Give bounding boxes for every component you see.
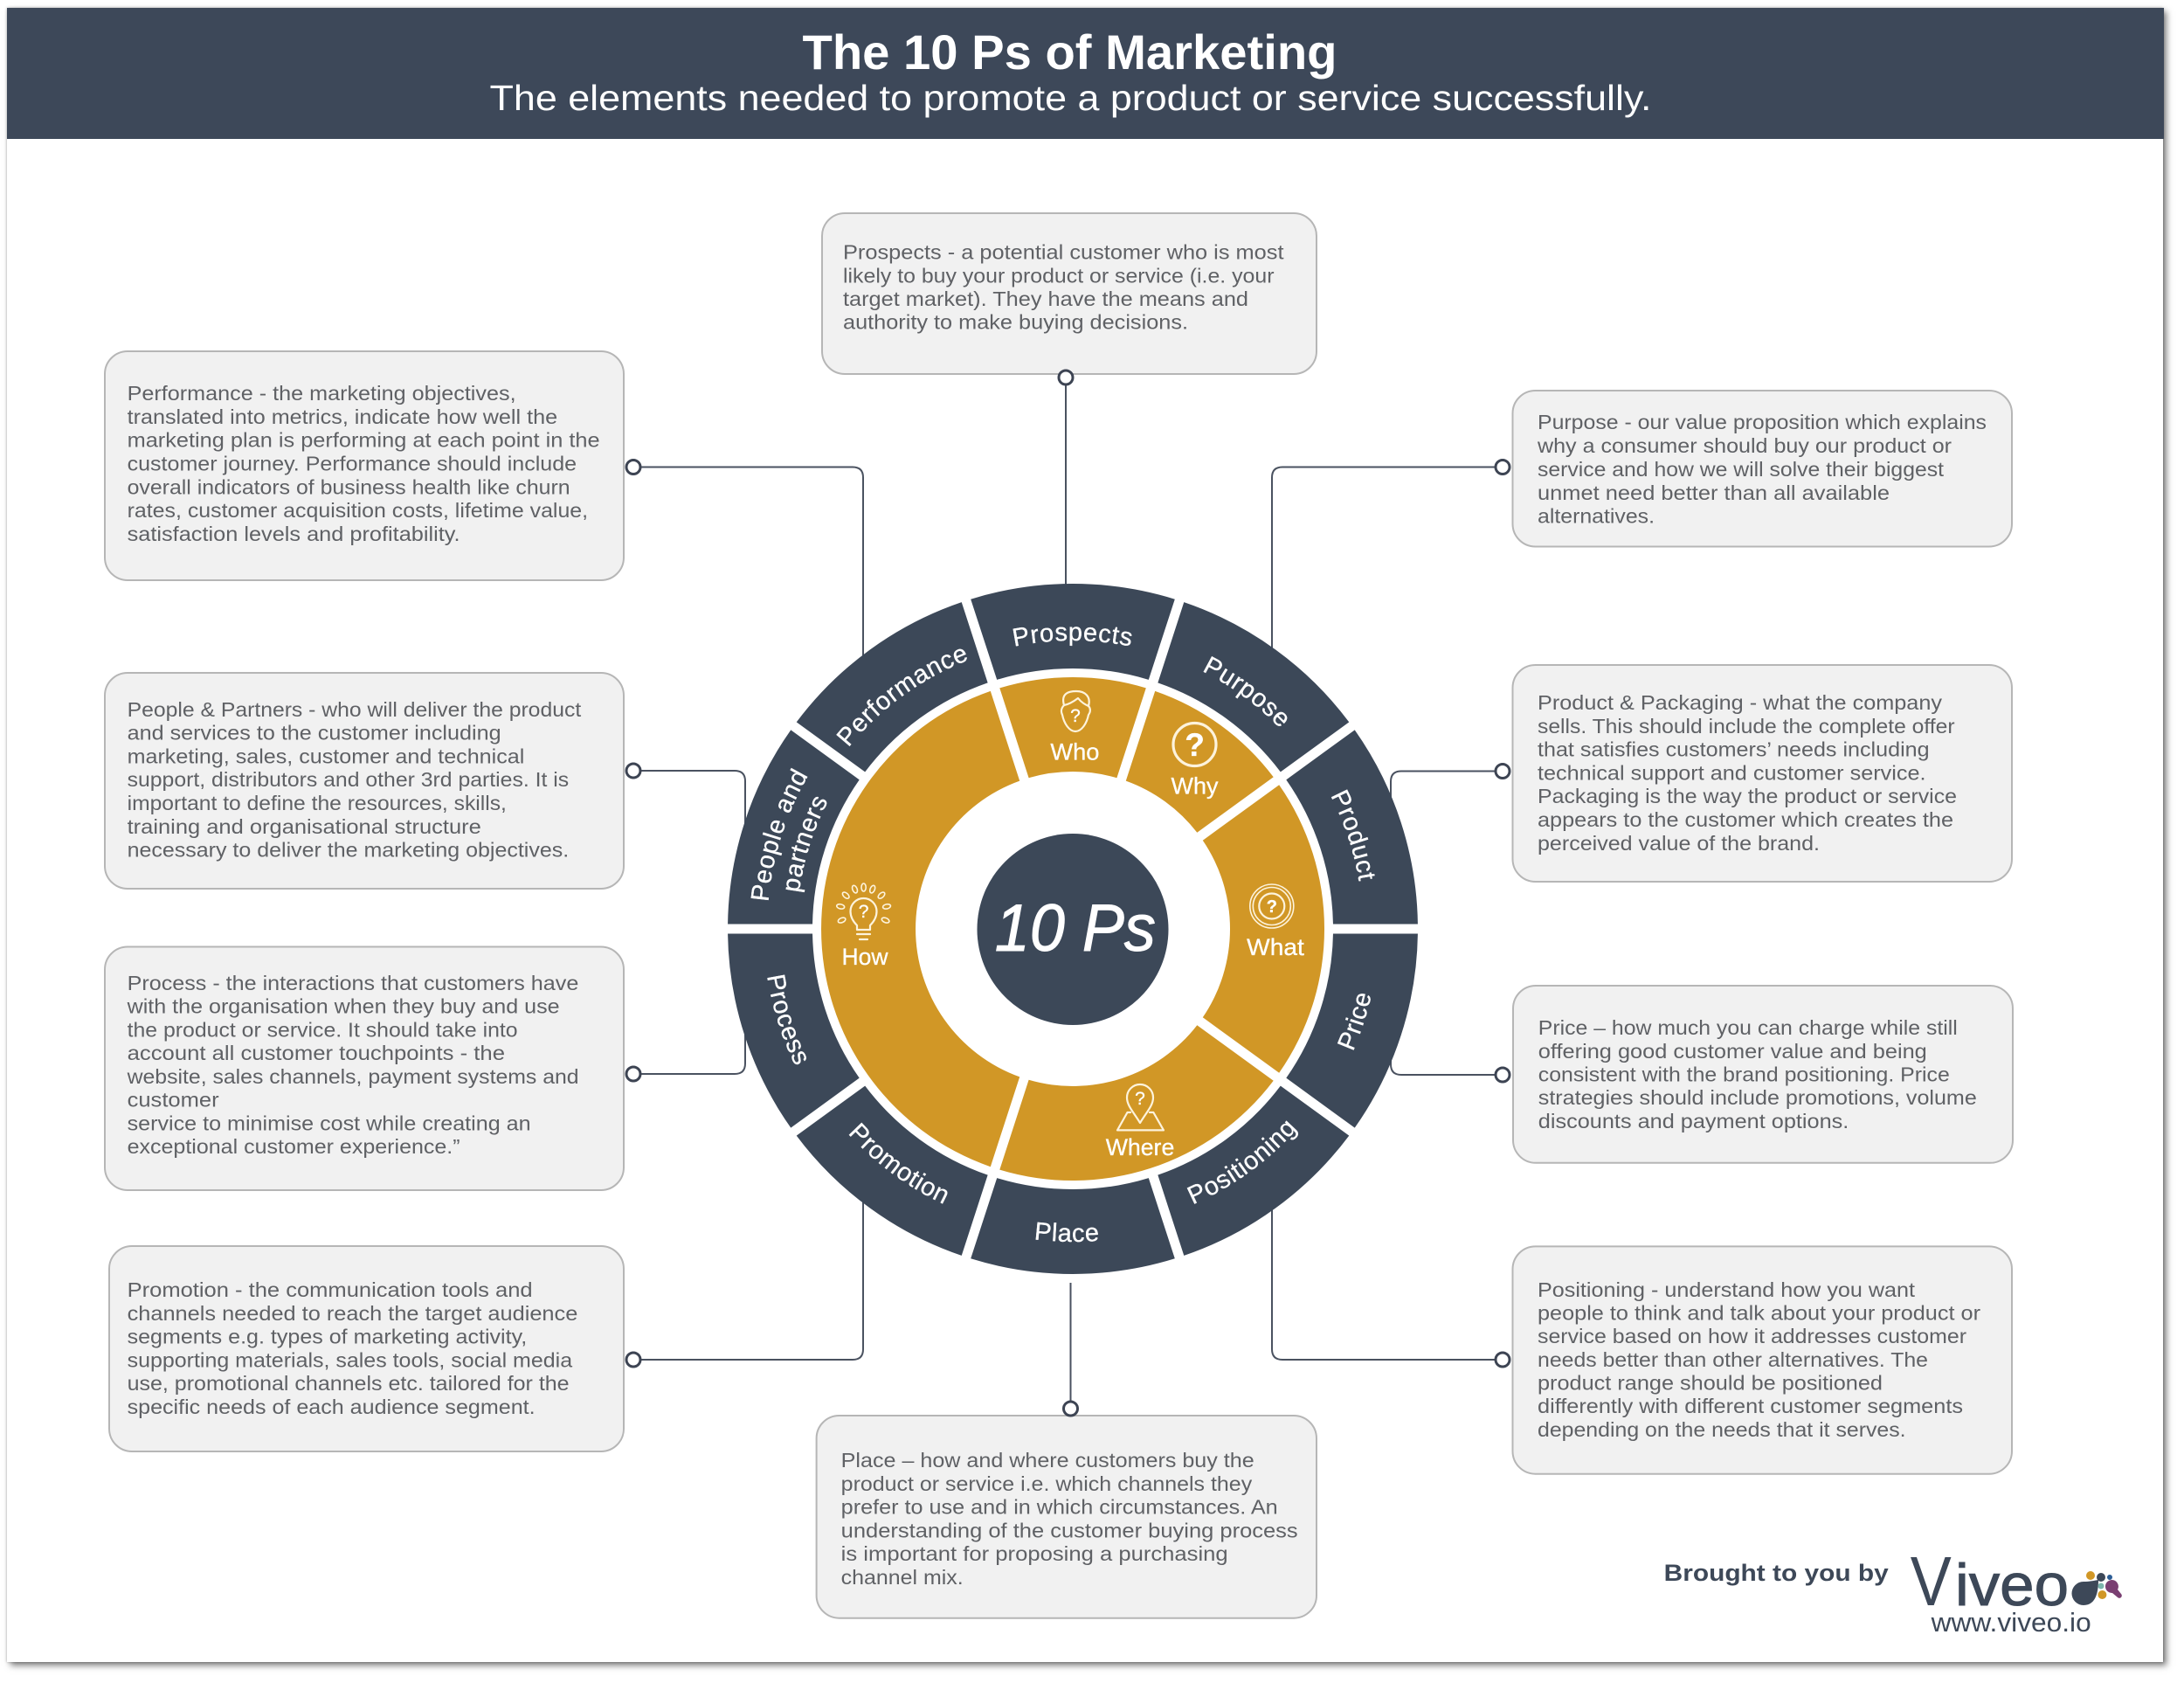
panel: People and Partners: and services to the customer including [128, 722, 501, 745]
panel: Positioning: needs better than other alternatives. The [1538, 1348, 1928, 1371]
title: The 10 Ps of Marketing [802, 24, 1337, 80]
segment: Who: Who [1050, 739, 1099, 765]
connector: Performance [626, 460, 863, 660]
logo: Viveo: V [1911, 1542, 1952, 1620]
panel: Purpose: why a consumer should buy our product or [1537, 434, 1952, 457]
segment: Who [999, 677, 1146, 778]
segment: How: How [842, 944, 888, 970]
panel: Performance [105, 351, 624, 580]
connector: Price [1391, 1059, 1510, 1082]
panel: Price [1513, 986, 2013, 1163]
panel: Price: consistent with the brand positioning. Price [1538, 1063, 1950, 1085]
segment: Performance: Performance [836, 648, 967, 746]
panel: Prospects: target market). They have the means and [843, 287, 1248, 310]
panel: Performance: customer journey. Performance should include [128, 453, 577, 475]
panel: Performance: translated into metrics, indicate how well the [128, 405, 557, 428]
panel: Positioning: people to think and talk about your product or [1538, 1302, 1980, 1325]
panel: Positioning: product range should be positioned [1538, 1372, 1883, 1395]
panel: Process: service to minimise cost while creating an [128, 1112, 531, 1134]
logo: Viveo: iveo [1955, 1552, 2069, 1618]
panel: Price: Price – how much you can charge while still [1538, 1016, 1958, 1039]
panel: People and Partners [105, 673, 624, 889]
panel: Performance: rates, customer acquisition costs, lifetime value, [128, 499, 588, 522]
panel: People and Partners: important to define the resources, skills, [128, 792, 507, 814]
panel: Product and Packaging [1513, 665, 2012, 882]
panel: Place: Place – how and where customers buy the [841, 1449, 1254, 1472]
icon: head with question mark [1061, 691, 1090, 731]
panel: People and Partners: necessary to deliver the marketing objectives. [128, 839, 569, 862]
segment: Promotion [797, 1085, 988, 1256]
icon: double ring question mark: ? [1267, 897, 1277, 917]
segment: People and partners [728, 730, 860, 925]
panel: People and Partners: training and organisational structure [128, 815, 481, 838]
wheel: inner gold ring of questions [821, 677, 1324, 1181]
panel: People and Partners: support, distributors and other 3rd parties. It is [128, 768, 569, 791]
panel: Prospects: authority to make buying decisions. [843, 311, 1188, 334]
panel: Place: product or service i.e. which channels they [841, 1472, 1252, 1495]
panel: Performance: Performance - the marketing objectives, [128, 382, 516, 405]
panel: Product and Packaging: that satisfies customers’ needs including [1538, 738, 1930, 761]
panel: Process: account all customer touchpoints - the [128, 1042, 505, 1064]
connector: Prospects [1059, 371, 1073, 587]
panel: Price: strategies should include promotions, volume [1538, 1086, 1977, 1109]
connector: Positioning [1272, 1206, 1510, 1367]
segment: Where [999, 1025, 1274, 1181]
segment: Prospects [971, 584, 1175, 680]
segment: Price: Price [1337, 994, 1371, 1050]
segment: Price [1286, 933, 1418, 1128]
segment: How [821, 691, 1019, 1167]
panel: Prospects: likely to buy your product or service (i.e. your [843, 264, 1275, 287]
panel: Product and Packaging: perceived value of the brand. [1538, 832, 1820, 855]
connector: Promotion [626, 1199, 863, 1367]
segment: Process: Process [767, 975, 806, 1064]
connector: Place [1064, 1283, 1078, 1416]
subtitle: The elements needed to promote a product or service successfully. [489, 78, 1651, 118]
panel: Price: offering good customer value and being [1538, 1040, 1927, 1063]
panel: Process: Process - the interactions that customers have [128, 972, 578, 994]
connector: Purpose [1272, 460, 1510, 652]
panel: Prospects [822, 213, 1317, 374]
panel: Promotion: segments e.g. types of marketing activity, [128, 1326, 527, 1348]
wheel: outer ring of ten Ps [728, 584, 1418, 1274]
icon: light bulb: ? [859, 902, 868, 922]
icon: light bulb [836, 883, 891, 939]
icon: circled question mark: ? [1185, 727, 1205, 763]
panel: Product and Packaging: appears to the customer which creates the [1538, 808, 1953, 831]
panel: Product and Packaging: technical support and customer service. [1538, 761, 1925, 784]
panel: Positioning: service based on how it addresses customer [1538, 1325, 1966, 1347]
icon: map pin [1117, 1084, 1164, 1130]
segment: Positioning: Positioning [1186, 1120, 1298, 1204]
panel: Product and Packaging: Packaging is the way the product or service [1538, 785, 1957, 807]
segment: Why [1126, 691, 1274, 833]
segment: What [1203, 785, 1324, 1073]
panel: Promotion: channels needed to reach the target audience [128, 1302, 577, 1325]
connector: Product [1391, 764, 1510, 800]
panel: Place: understanding of the customer buying process [841, 1519, 1298, 1541]
connector: Process [626, 1033, 745, 1081]
panel: Process [105, 947, 624, 1190]
segment: Product: Product [1331, 789, 1375, 881]
panel: Purpose: service and how we will solve their biggest [1538, 458, 1944, 481]
panel: Promotion: Promotion - the communication tools and [128, 1278, 533, 1301]
brand: website: www.viveo.io [1931, 1607, 2091, 1638]
icon: map pin: ? [1135, 1089, 1145, 1109]
icon: head with question mark: ? [1070, 706, 1081, 726]
panel: Place [817, 1416, 1317, 1618]
panel: Price: discounts and payment options. [1538, 1110, 1849, 1132]
panel: Purpose: unmet need better than all available [1538, 481, 1890, 504]
panel: Purpose [1513, 391, 2012, 547]
panel: Positioning [1513, 1246, 2012, 1474]
brand: Brought to you by: Brought to you by [1664, 1560, 1889, 1586]
panel: People and Partners: marketing, sales, customer and technical [128, 745, 524, 767]
segment: Product [1286, 730, 1418, 925]
logo: Viveo [1911, 1542, 2122, 1620]
panel: Process: exceptional customer experience.” [128, 1135, 460, 1158]
panel: Purpose: Purpose - our value proposition which explains [1538, 411, 1987, 433]
panel: Promotion: specific needs of each audience segment. [128, 1396, 536, 1418]
segment: Prospects: Prospects [1013, 627, 1132, 647]
segment: Place: Place [1036, 1222, 1098, 1243]
segment: People and partners: People and [751, 767, 807, 900]
panel: Positioning: Positioning - understand how you want [1538, 1278, 1915, 1301]
panel: Positioning: depending on the needs that it serves. [1538, 1418, 1906, 1441]
panel: Promotion [109, 1246, 624, 1451]
panel: Process: the product or service. It should take into [128, 1018, 518, 1041]
panel: Performance: marketing plan is performing at each point in the [128, 429, 600, 452]
icon: circled question mark [1173, 724, 1216, 765]
segment: Purpose [1158, 602, 1349, 772]
panel: Product and Packaging: sells. This should include the complete offer [1538, 715, 1955, 738]
segment: Promotion: Promotion [849, 1122, 947, 1204]
panel: Promotion: supporting materials, sales tools, social media [128, 1348, 573, 1371]
panel: Purpose: alternatives. [1538, 505, 1655, 528]
panel: Process: with the organisation when they buy and use [127, 995, 560, 1018]
panel: Prospects: Prospects - a potential customer who is most [843, 241, 1284, 264]
segment: Place [971, 1178, 1175, 1274]
segment: People and partners: partners [786, 797, 826, 893]
panel: People and Partners: People & Partners - who will deliver the product [128, 698, 582, 721]
panel: Product and Packaging: Product & Packaging - what the company [1538, 691, 1942, 714]
panel: Place: is important for proposing a purchasing [841, 1542, 1228, 1565]
centre circle: 10 Ps: 10 Ps [995, 891, 1156, 966]
icon: double ring question mark [1250, 884, 1294, 928]
segment: Purpose: Purpose [1204, 656, 1288, 726]
panel: Process: customer [128, 1089, 219, 1112]
segment: Performance [797, 602, 988, 772]
connector: People and partners [626, 764, 745, 825]
segment: Process [728, 933, 860, 1128]
header banner [7, 8, 2164, 139]
panel: Place: prefer to use and in which circumstances. An [841, 1496, 1278, 1519]
centre circle: 10 Ps [977, 834, 1169, 1025]
segment: Positioning [1158, 1085, 1349, 1256]
segment: Where: Where [1106, 1134, 1174, 1160]
panel: Performance: overall indicators of business health like churn [128, 475, 570, 498]
panel: Performance: satisfaction levels and profitability. [128, 523, 460, 545]
panel: Place: channel mix. [841, 1566, 964, 1589]
panel: Process: website, sales channels, payment systems and [127, 1065, 579, 1088]
segment: What: What [1247, 934, 1304, 960]
panel: Positioning: differently with different customer segments [1538, 1395, 1963, 1417]
segment: Why: Why [1171, 772, 1219, 799]
panel: Promotion: use, promotional channels etc. tailored for the [128, 1372, 570, 1395]
